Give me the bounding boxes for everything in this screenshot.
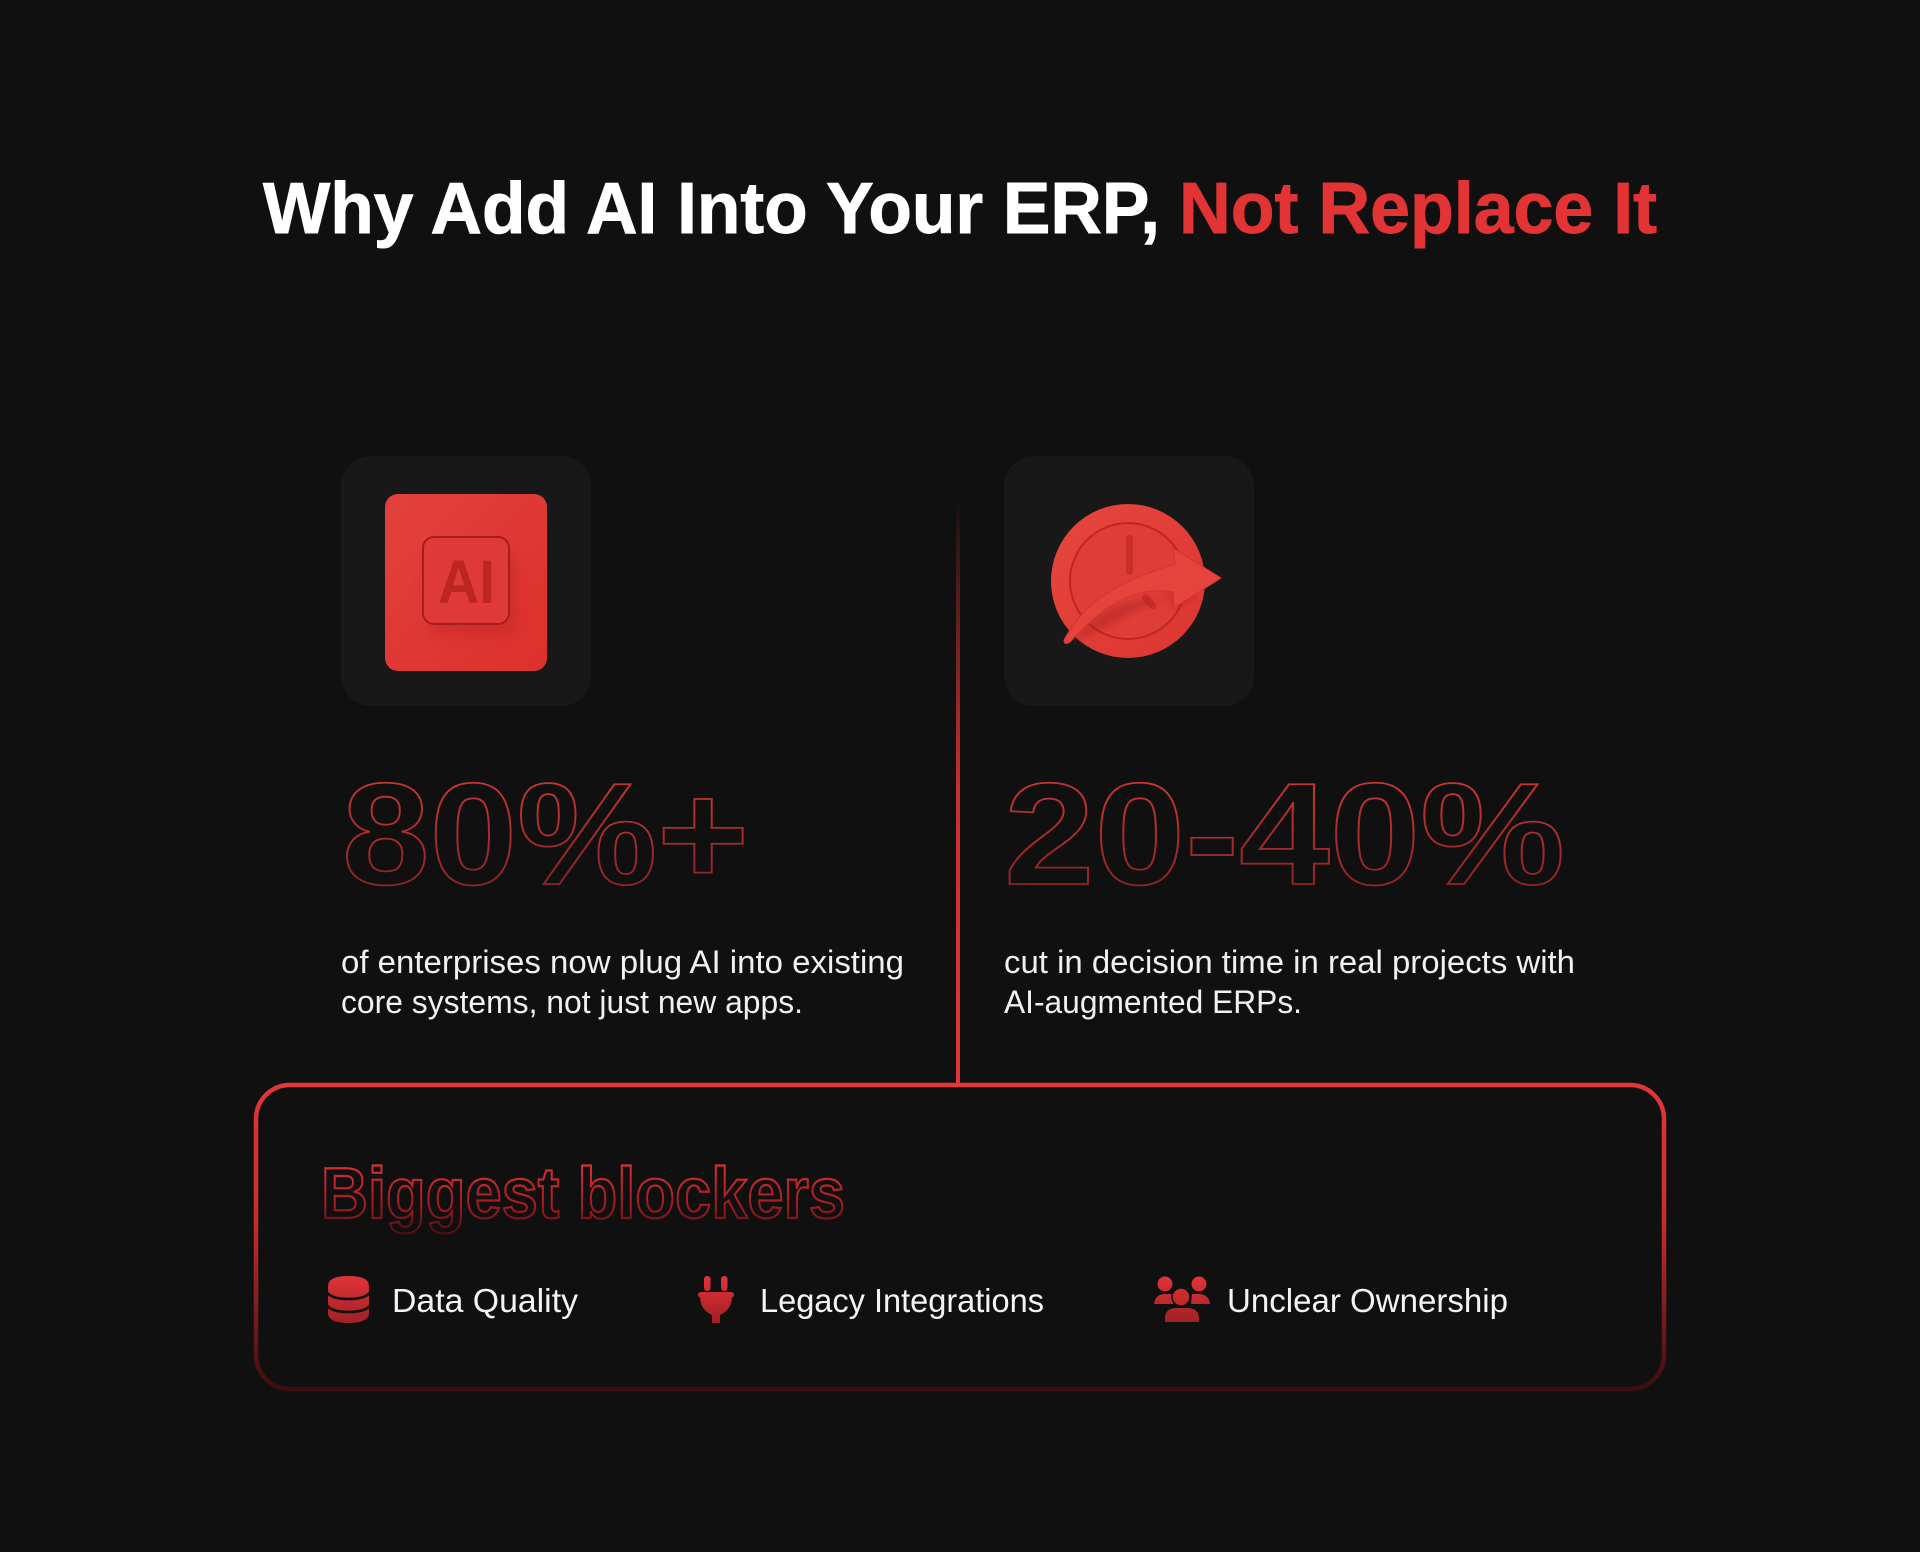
- blocker: unclear ownership: [1154, 1276, 1508, 1322]
- label: data quality: Data Quality: [392, 1282, 578, 1319]
- stat: 80%+: 80%+: [342, 753, 749, 915]
- description: 80%+: of enterprises now plug AI into existing: [341, 944, 904, 980]
- blockers frame: [256, 1085, 1664, 1389]
- blocker: legacy integrations: [698, 1276, 1044, 1323]
- heading: biggest blockers: Biggest blockers: [321, 1154, 845, 1234]
- description: 20-40%: cut in decision time in real projects with: [1004, 944, 1575, 980]
- icon: plug: [698, 1276, 734, 1323]
- panel: biggest blockers: [256, 1085, 1664, 1389]
- icon: AI chip: AI: [438, 548, 495, 616]
- description: 20-40%: AI-augmented ERPs.: [1004, 984, 1302, 1020]
- icon: people: [1154, 1276, 1210, 1322]
- description: 20-40%: [1004, 944, 1575, 1020]
- title: Not Replace It: [1179, 169, 1657, 249]
- icon: clock with arrow: [1004, 456, 1254, 706]
- panel: enterprise AI adoption: [341, 456, 904, 1020]
- title: [263, 169, 1657, 249]
- title: Why Add AI Into Your ERP,: [263, 169, 1160, 249]
- panel: decision time: [1004, 456, 1575, 1020]
- description: 80%+: [341, 944, 904, 1020]
- center connector line: [956, 498, 960, 1086]
- icon: AI chip: [341, 456, 591, 706]
- icon: database: [326, 1276, 371, 1323]
- label: unclear ownership: Unclear Ownership: [1227, 1282, 1508, 1319]
- blocker: data quality: [326, 1276, 578, 1323]
- description: 80%+: core systems, not just new apps.: [341, 984, 803, 1020]
- label: legacy integrations: Legacy Integrations: [760, 1282, 1044, 1319]
- stat: 20-40%: 20-40%: [1004, 753, 1565, 915]
